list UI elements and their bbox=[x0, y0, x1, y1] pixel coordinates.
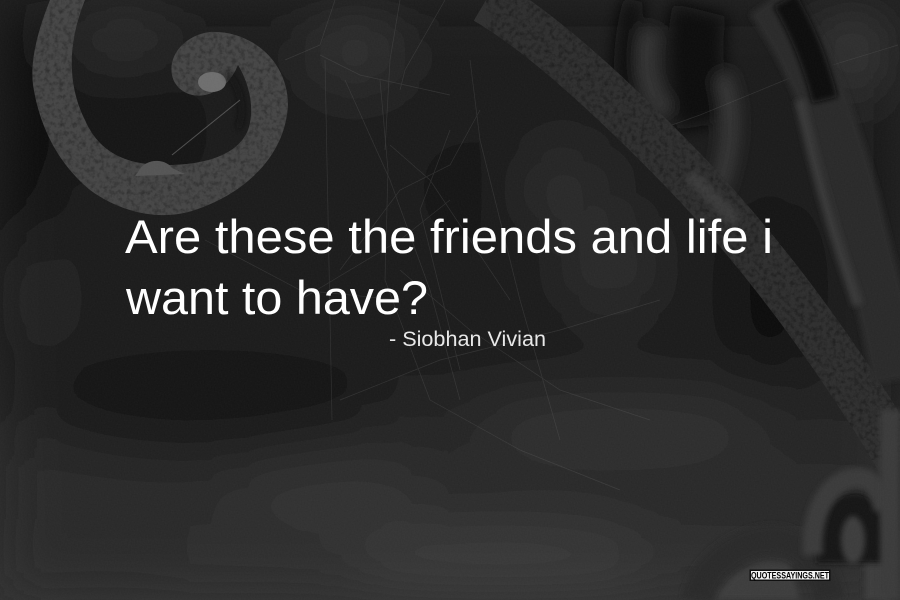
iron spiral scroll bbox=[32, 0, 288, 215]
quote text bbox=[125, 210, 773, 324]
quote text: Are these the friends and life i bbox=[125, 210, 773, 263]
blurred background ironwork bbox=[625, 0, 730, 190]
diagonal iron rod bbox=[486, 0, 900, 460]
watermark: QUOTESSAYINGS.NET bbox=[751, 570, 829, 580]
quote text: want to have? bbox=[125, 271, 428, 324]
bottom iron curls bbox=[697, 410, 890, 600]
attribution: - Siobhan Vivian bbox=[389, 328, 546, 351]
spider web bbox=[205, 0, 898, 490]
right iron bar bbox=[770, 0, 897, 380]
